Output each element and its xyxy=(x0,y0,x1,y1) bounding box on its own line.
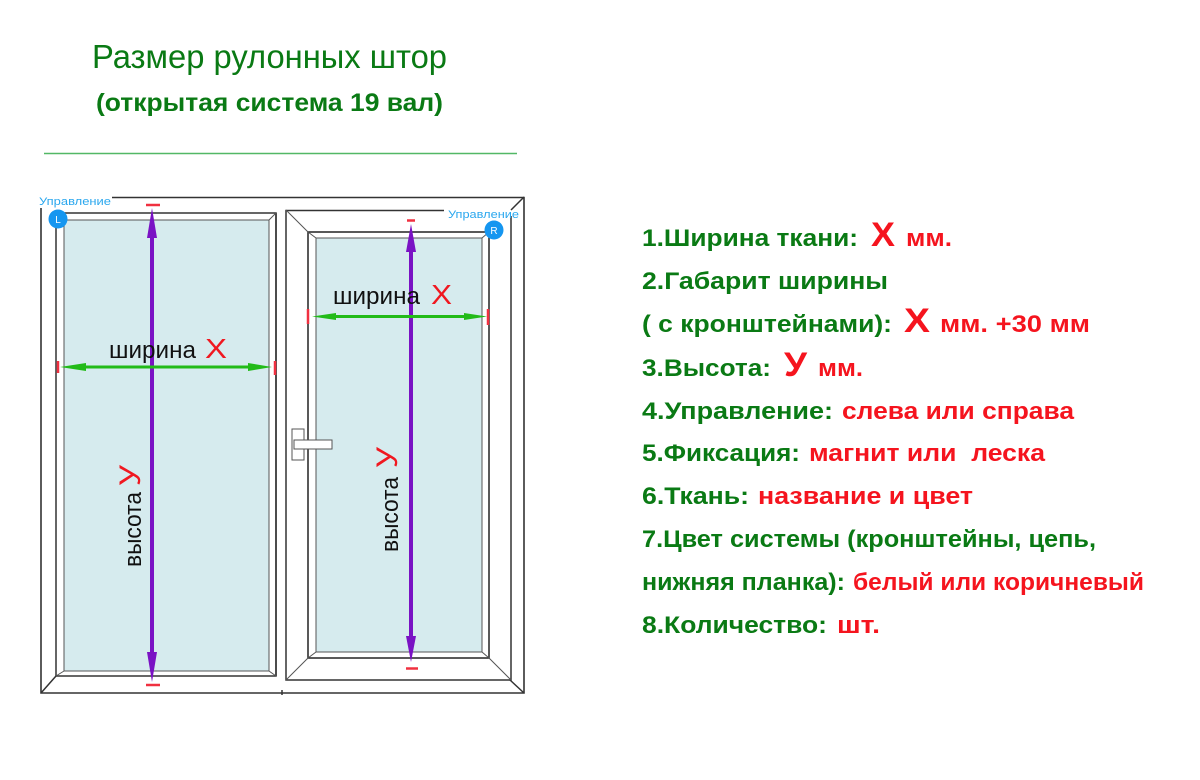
label: left width: ширина xyxy=(109,337,197,364)
item 6: название и цвет xyxy=(758,483,973,510)
item 1 xyxy=(642,216,952,254)
item 7 line 2 xyxy=(642,569,1144,596)
label: left height: высота xyxy=(120,491,147,567)
label: left width xyxy=(109,333,227,364)
item 5 xyxy=(642,440,1046,467)
window frame xyxy=(41,197,524,695)
control L: Управление xyxy=(39,196,111,208)
label: right height: высота xyxy=(377,476,404,552)
item 1: 1.Ширина ткани: xyxy=(642,225,858,252)
item 7 line 2: белый или коричневый xyxy=(853,569,1144,596)
right sash xyxy=(286,210,511,680)
label: right height: У xyxy=(371,446,404,468)
item 5: 5.Фиксация: xyxy=(642,440,800,467)
label: left height xyxy=(114,464,147,567)
item 3: 3.Высота: xyxy=(642,355,771,382)
item 3 xyxy=(642,346,863,384)
label: right width: ширина xyxy=(333,283,421,310)
item 1: мм. xyxy=(906,225,952,252)
item 4: слева или справа xyxy=(842,398,1075,425)
title: Размер рулонных штор xyxy=(92,38,447,75)
item 2 line 2: мм. +30 мм xyxy=(940,311,1090,338)
label: left width: X xyxy=(205,333,227,364)
item 2 line 2 xyxy=(642,302,1090,340)
control L: L xyxy=(55,215,61,226)
arrow: left height xyxy=(146,205,160,685)
control R xyxy=(448,209,519,240)
item 4 xyxy=(642,398,1075,425)
left pane xyxy=(56,213,276,676)
control R: R xyxy=(490,226,498,237)
control L xyxy=(39,196,111,228)
control R: Управление xyxy=(448,209,519,221)
title: (открытая система 19 вал) xyxy=(96,89,443,117)
item 2 line 2: Х xyxy=(904,302,930,340)
order parameters list xyxy=(642,216,1144,639)
item 2 line 1: 2.Габарит ширины xyxy=(642,268,888,295)
label: right width: X xyxy=(431,279,452,310)
item 8: шт. xyxy=(837,612,880,639)
item 1: Х xyxy=(871,216,895,254)
arrow: right height xyxy=(406,220,418,668)
item 3: У xyxy=(784,346,808,384)
label: right width xyxy=(333,279,452,310)
item 2 line 2: ( с кронштейнами): xyxy=(642,311,892,338)
window diagram xyxy=(39,196,524,695)
item 5: магнит или леска xyxy=(809,440,1046,467)
icon: window handle xyxy=(292,429,332,460)
label: left height: У xyxy=(114,464,147,486)
arrow: right width xyxy=(308,309,488,325)
item 4: 4.Управление: xyxy=(642,398,833,425)
item 6: 6.Ткань: xyxy=(642,483,749,510)
label: right height xyxy=(371,446,404,552)
title xyxy=(92,38,447,117)
item 8: 8.Количество: xyxy=(642,612,827,639)
item 3: мм. xyxy=(818,355,863,382)
item 7 line 2: нижняя планка): xyxy=(642,569,845,596)
arrow: left width xyxy=(58,361,275,375)
item 7 line 1: 7.Цвет системы (кронштейны, цепь, xyxy=(642,526,1096,553)
item 6 xyxy=(642,483,973,510)
